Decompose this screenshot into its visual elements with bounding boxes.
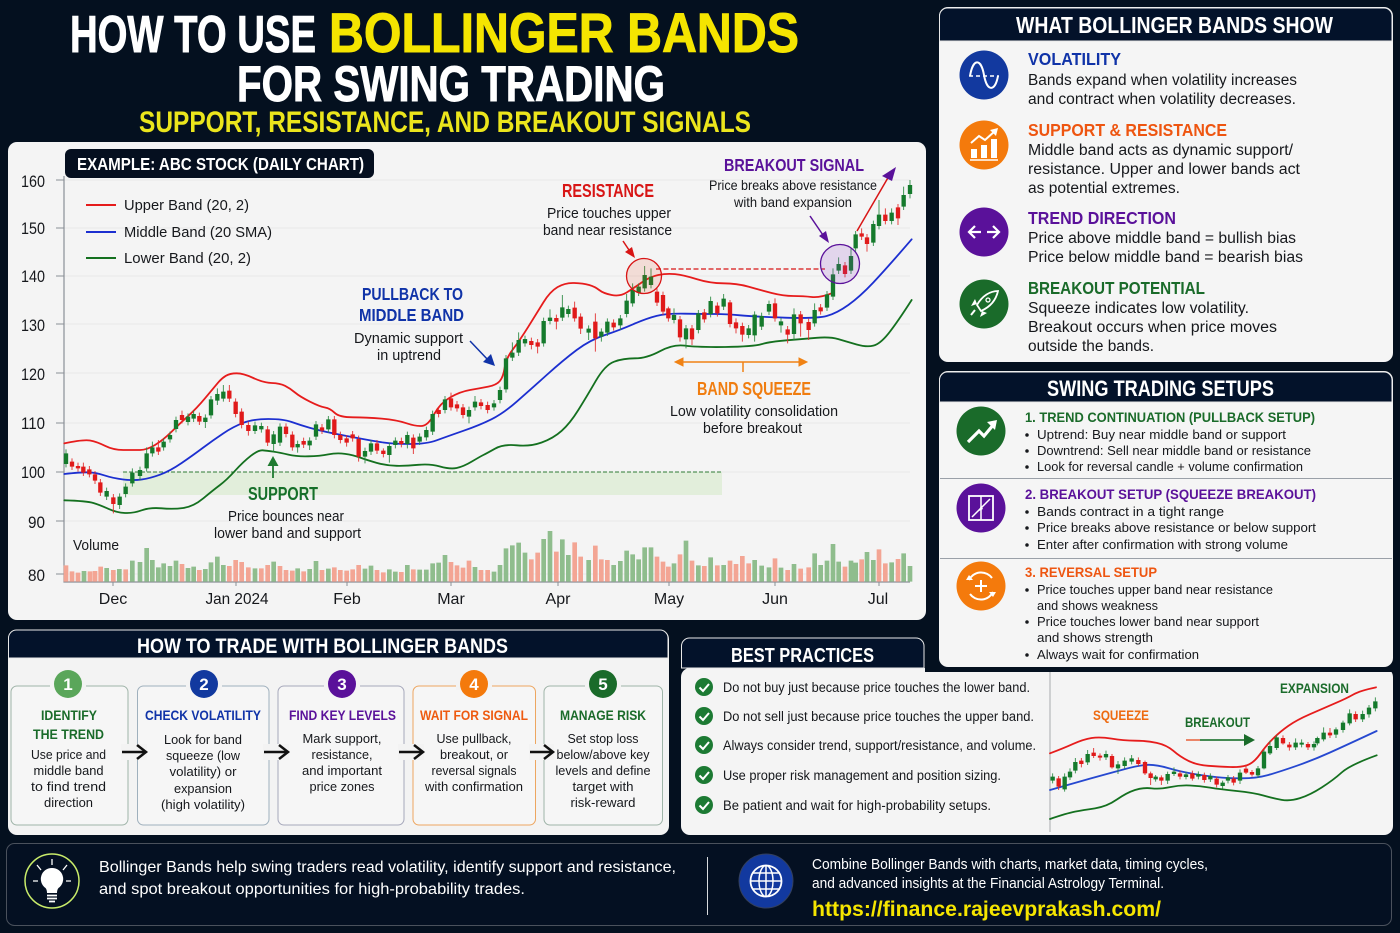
step 4: reversal signals (432, 763, 517, 778)
month axis: Mar (437, 591, 465, 608)
arrow: step 2 to 3 (263, 744, 289, 760)
takeaway text: and spot breakout opportunities for high-probability trades. (99, 881, 525, 898)
setup: breakout (956, 484, 1316, 552)
item: support and resistance: SUPPORT & RESISTANCE (1028, 120, 1227, 140)
mini chart: squeeze, breakout, expansion: BREAKOUT (1185, 714, 1250, 730)
step 3: and important (302, 763, 382, 778)
step 1: middle band (34, 763, 104, 778)
item: volatility (960, 49, 1297, 108)
step 5: 5 (598, 675, 608, 694)
step 3: price zones (310, 779, 375, 794)
setup: breakout: Enter after confirmation with strong volume (1037, 537, 1288, 552)
price axis: 80 (28, 566, 45, 585)
step 1: direction (44, 795, 93, 810)
month axis: Dec (99, 591, 127, 608)
price axis: 90 (28, 513, 45, 532)
step 2: CHECK VOLATILITY (145, 707, 262, 723)
panel: what bollinger bands show (939, 7, 1393, 362)
mini chart: squeeze, breakout, expansion: EXPANSION (1280, 680, 1349, 696)
setup: trend continuation: Uptrend: Buy near middle band or support (1037, 427, 1286, 442)
title: SUPPORT, RESISTANCE, AND BREAKOUT SIGNALS (139, 106, 751, 139)
annotation: breakout signal (709, 155, 896, 284)
step 2 (138, 670, 269, 825)
legend: Middle Band (20 SMA) (124, 224, 272, 241)
practice 4: Use proper risk management and position sizing. (723, 768, 1001, 783)
link text: and advanced insights at the Financial Astrology Terminal. (812, 876, 1164, 892)
title: FOR SWING TRADING (237, 56, 665, 112)
month axis: May (654, 591, 684, 608)
volume bars (66, 531, 910, 582)
icon: globe (739, 854, 793, 908)
step 2: squeeze (low (166, 748, 241, 763)
takeaway text (99, 859, 676, 898)
chart title badge (65, 149, 374, 178)
price axis: 110 (21, 414, 45, 433)
annotation: pullback to middle band (354, 284, 495, 366)
price axis: 160 (21, 172, 45, 191)
month axis: Jun (762, 591, 788, 608)
practice 2: Do not sell just because price touches the upper band. (723, 709, 1034, 724)
annotation: support: Price bounces near (228, 508, 344, 525)
panel: swing trading setups (939, 371, 1393, 667)
step 4 (413, 670, 536, 825)
step 5: levels and define (556, 763, 650, 778)
item: support and resistance: as potential extremes. (1028, 180, 1180, 197)
title: BOLLINGER BANDS (329, 1, 799, 64)
step 4: breakout, or (440, 747, 509, 762)
setup: trend continuation: Look for reversal candle + volume confirmation (1037, 459, 1303, 474)
item: trend direction: TREND DIRECTION (1028, 208, 1176, 228)
icon: light bulb (25, 854, 79, 908)
legend (86, 197, 272, 267)
step 5: target with (572, 779, 634, 794)
annotation: pullback to middle band: Dynamic support (354, 330, 464, 347)
title (70, 1, 799, 139)
price axis: 120 (21, 365, 45, 384)
step 2: 2 (199, 675, 209, 694)
step 3: resistance, (312, 747, 372, 762)
arrow: step 4 to 5 (529, 744, 554, 760)
month axis: Jan 2024 (206, 591, 269, 608)
mini chart: squeeze, breakout, expansion (1050, 680, 1377, 819)
setup: reversal: Always wait for confirmation (1037, 647, 1199, 662)
bollinger band lines (64, 239, 912, 513)
panel: how to trade with bollinger bands (8, 630, 669, 835)
step 4: 4 (469, 675, 479, 694)
item: breakout potential: BREAKOUT POTENTIAL (1028, 278, 1205, 298)
item: trend direction: Price below middle band = bearish bias (1028, 249, 1303, 266)
item: trend direction (960, 208, 1303, 266)
link text: Combine Bollinger Bands with charts, market data, timing cycles, (812, 857, 1208, 873)
mini chart: squeeze, breakout, expansion: SQUEEZE (1093, 707, 1149, 723)
month axis (99, 591, 888, 608)
candlesticks (66, 180, 910, 513)
step 5: MANAGE RISK (560, 707, 646, 723)
setup: reversal: Price touches lower band near support (1037, 614, 1259, 629)
annotation: pullback to middle band: MIDDLE BAND (359, 305, 464, 325)
panel: best practices (681, 638, 1393, 835)
item: breakout potential: Breakout occurs when price moves (1028, 319, 1277, 336)
setup: breakout: Price breaks above resistance or below support (1037, 520, 1316, 535)
panel heading: SWING TRADING SETUPS (1047, 376, 1274, 401)
price axis (21, 172, 910, 586)
item: volatility: and contract when volatility decreases. (1028, 91, 1296, 108)
step 4: WAIT FOR SIGNAL (420, 707, 528, 723)
item: support and resistance: resistance. Upper and lower bands act (1028, 161, 1301, 178)
setup: reversal (956, 562, 1273, 662)
item: volatility: VOLATILITY (1028, 49, 1121, 69)
annotation: band squeeze (670, 358, 838, 437)
panel: footer (6, 844, 1392, 926)
link text (812, 857, 1208, 921)
item: volatility: Bands expand when volatility increases (1028, 72, 1297, 89)
setup: reversal: Price touches upper band near resistance (1037, 582, 1273, 597)
step 5 (544, 670, 662, 825)
step 2: Look for band (164, 732, 242, 747)
setup: breakout: Bands contract in a tight range (1037, 504, 1224, 519)
legend: Upper Band (20, 2) (124, 197, 249, 214)
step 1: 1 (63, 675, 73, 694)
annotation: resistance (543, 181, 825, 294)
annotation: pullback to middle band: PULLBACK TO (362, 284, 463, 304)
annotation: support: SUPPORT (248, 484, 318, 504)
month axis: Apr (546, 591, 571, 608)
price axis: 130 (21, 316, 45, 335)
step 5: below/above key (556, 747, 650, 762)
takeaway text: Bollinger Bands help swing traders read volatility, identify support and resistance, (99, 859, 676, 876)
setup: breakout: 2. BREAKOUT SETUP (SQUEEZE BREAKOUT) (1025, 486, 1316, 502)
annotation: band squeeze: Low volatility consolidation (670, 403, 838, 420)
annotation: breakout signal: BREAKOUT SIGNAL (724, 155, 864, 175)
setup: trend continuation: 1. TREND CONTINUATION (PULLBACK SETUP) (1025, 409, 1315, 425)
title: HOW TO USE (70, 6, 316, 64)
annotation: support (214, 456, 362, 542)
setup: trend continuation (956, 406, 1315, 474)
setup: reversal: 3. REVERSAL SETUP (1025, 564, 1157, 580)
panel: price chart (8, 142, 926, 620)
step 5: risk-reward (570, 795, 636, 810)
practice 1: Do not buy just because price touches the lower band. (723, 680, 1030, 695)
step 2: expansion (174, 781, 232, 796)
volume label: Volume (73, 537, 119, 554)
link text: https://finance.rajeevprakash.com/ (812, 898, 1161, 921)
annotation: pullback to middle band: in uptrend (377, 347, 441, 364)
step 1: IDENTIFY (41, 707, 98, 723)
legend: Lower Band (20, 2) (124, 250, 251, 267)
step 3: Mark support, (302, 731, 382, 746)
step 3 (278, 670, 404, 825)
panel heading: WHAT BOLLINGER BANDS SHOW (1016, 12, 1333, 38)
arrow: step 3 to 4 (398, 744, 424, 760)
setup: trend continuation: Downtrend: Sell near middle band or resistance (1037, 443, 1311, 458)
step 3: 3 (337, 675, 347, 694)
item: support and resistance: Middle band acts as dynamic support/ (1028, 142, 1294, 159)
item: trend direction: Price above middle band = bullish bias (1028, 230, 1296, 247)
step 3: FIND KEY LEVELS (289, 707, 396, 723)
arrow: step 1 to 2 (121, 744, 147, 760)
item: breakout potential (960, 278, 1277, 355)
practice 3: Always consider trend, support/resistance, and volume. (723, 738, 1036, 753)
panel heading: BEST PRACTICES (731, 644, 874, 667)
month axis: Jul (868, 591, 888, 608)
step 4: Use pullback, (436, 731, 512, 746)
annotation: support: lower band and support (214, 525, 362, 542)
step 1: to find trend (31, 779, 106, 794)
annotation: resistance: Price touches upper (547, 205, 671, 222)
practice 5: Be patient and wait for high-probability setups. (723, 798, 991, 813)
setup: reversal: and shows weakness (1037, 598, 1158, 613)
item: breakout potential: outside the bands. (1028, 338, 1154, 355)
chart title badge: EXAMPLE: ABC STOCK (DAILY CHART) (77, 154, 364, 174)
annotation: breakout signal: with band expansion (733, 194, 852, 210)
annotation: band squeeze: BAND SQUEEZE (697, 379, 811, 399)
item: breakout potential: Squeeze indicates low volatility. (1028, 300, 1249, 317)
annotation: breakout signal: Price breaks above resistance (709, 177, 877, 193)
step 2: (high volatility) (161, 797, 245, 812)
step 1: Use price and (31, 747, 106, 762)
step 4: with confirmation (424, 779, 523, 794)
price axis: 140 (21, 267, 45, 286)
support zone (123, 472, 722, 495)
annotation: band squeeze: before breakout (703, 420, 803, 437)
panel heading: HOW TO TRADE WITH BOLLINGER BANDS (137, 634, 508, 658)
price axis: 150 (21, 219, 45, 238)
step 1 (11, 670, 128, 825)
step 5: Set stop loss (568, 731, 639, 746)
price axis: 100 (21, 463, 45, 482)
annotation: resistance: band near resistance (543, 222, 672, 239)
annotation: resistance: RESISTANCE (562, 181, 654, 201)
step 1: THE TREND (33, 726, 104, 742)
setup: reversal: and shows strength (1037, 630, 1153, 645)
month axis: Feb (333, 591, 361, 608)
item: support and resistance (960, 120, 1301, 197)
step 2: volatility) or (170, 764, 237, 779)
